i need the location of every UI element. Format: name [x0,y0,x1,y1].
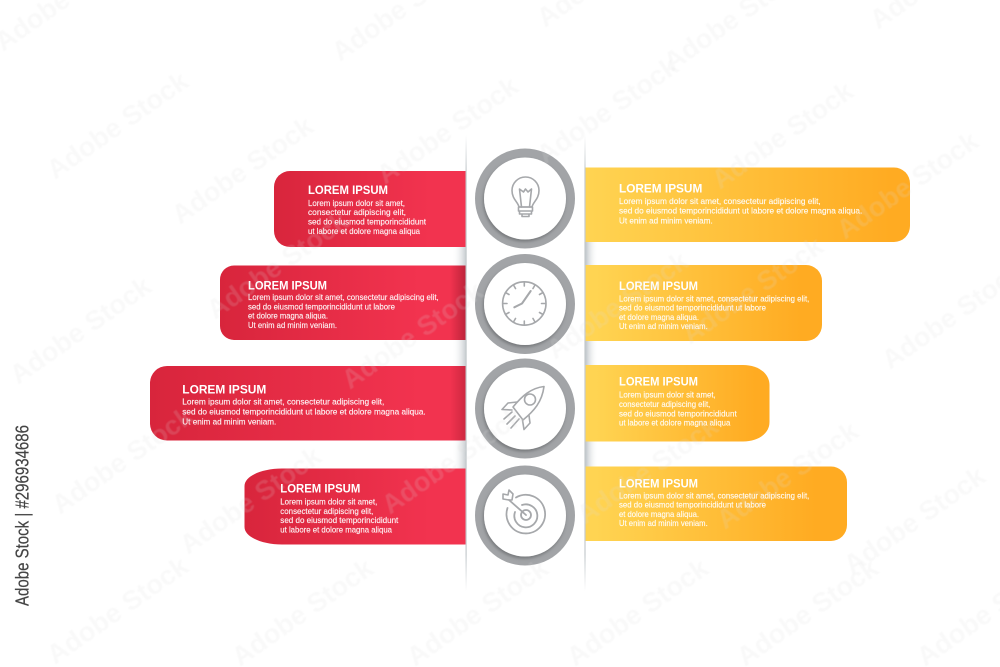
watermark: Adobe Stock [831,125,984,245]
watermark: Adobe Stock [46,400,199,520]
watermark: Adobe Stock [376,400,529,520]
text block: yellow bar 2: Lorem ipsum dolor sit amet, consectetur adipiscing elit, [619,293,809,303]
icon: clock [503,282,546,325]
watermark: Adobe Stock [676,230,829,350]
text block: yellow bar 1: Ut enim ad minim veniam. [619,215,713,225]
panel: circle with clock [475,254,575,354]
text block: yellow bar 2 [619,293,809,331]
watermark: Adobe Stock [336,275,489,395]
text block: red bar 3 [182,397,426,427]
text block: yellow bar 4: Ut enim ad minim veniam. [619,518,708,528]
text block: yellow bar 3: sed do eiusmod temporincididunt [619,408,737,418]
watermark: Adobe Stock [711,415,864,535]
text block: red bar 4: ut labore et dolore magna aliqua [280,524,392,534]
panel: yellow bar 4 [585,466,847,541]
heading: yellow bar 2: LOREM IPSUM [619,279,698,293]
watermark: Adobe Stock [201,205,354,325]
icon: lightbulb [512,177,539,216]
text block: red bar 2: sed do eiusmod temporincididunt ut labore [248,301,395,311]
text block: yellow bar 4: et dolore magna aliqua. [619,509,699,519]
watermark: Adobe Stock [531,50,684,170]
watermark: Adobe Stock [41,550,194,667]
text block: yellow bar 3 [619,390,737,427]
text block: red bar 2: Ut enim ad minim veniam. [248,320,337,330]
watermark: Adobe Stock [41,65,194,185]
heading: yellow bar 1: LOREM IPSUM [619,181,702,195]
panel: red bar 1 [274,171,466,247]
watermark: Adobe Stock [4,270,157,390]
text block: red bar 2: et dolore magna aliqua. [248,311,328,321]
watermark: Adobe Stock [706,75,859,195]
watermark: Adobe Stock [571,410,724,530]
text block: red bar 4: sed do eiusmod temporincididunt [280,515,399,525]
text block: red bar 4: Lorem ipsum dolor sit amet, [280,497,377,507]
text block: yellow bar 2: et dolore magna aliqua. [619,312,699,322]
text block: yellow bar 2: Ut enim ad minim veniam. [619,321,708,331]
text block: yellow bar 4 [619,490,809,528]
panel: circle with lightbulb [475,148,575,248]
heading: red bar 3: LOREM IPSUM [182,382,266,396]
watermark: Adobe Stock [838,460,991,580]
text block: yellow bar 2: sed do eiusmod temporincididunt ut labore [619,303,766,313]
text block: yellow bar 1: Lorem ipsum dolor sit amet, consectetur adipiscing elit, [619,196,821,206]
panel: yellow bar 3 [585,365,770,442]
watermark: Adobe Stock [541,245,694,365]
text block: red bar 3: Ut enim ad minim veniam. [182,417,276,427]
heading: red bar 1: LOREM IPSUM [308,183,388,197]
panel: yellow bar 1 [585,168,910,242]
text block: red bar 1: ut labore et dolore magna aliqua [308,226,420,236]
text block: yellow bar 1 [619,196,862,225]
text block: yellow bar 4: sed do eiusmod temporincididunt ut labore [619,500,766,510]
heading: red bar 4: LOREM IPSUM [280,482,360,496]
text block: yellow bar 3: Lorem ipsum dolor sit amet, [619,390,716,400]
panel: red bar 3 [150,366,466,440]
icon: rocket [502,386,544,430]
text block: red bar 3: sed do eiusmod temporincididunt ut labore et dolore magna aliqua. [182,407,426,417]
heading: red bar 2: LOREM IPSUM [248,278,327,292]
text block: red bar 1: consectetur adipiscing elit, [308,207,406,217]
heading: yellow bar 4: LOREM IPSUM [619,477,698,491]
text block: yellow bar 4: Lorem ipsum dolor sit amet, consectetur adipiscing elit, [619,490,809,500]
panel: circle with target [475,466,575,566]
text block: red bar 1: Lorem ipsum dolor sit amet, [308,198,405,208]
text block: red bar 1: sed do eiusmod temporincididunt [308,216,427,226]
heading: yellow bar 3: LOREM IPSUM [619,375,698,389]
text block: yellow bar 1: sed do eiusmod temporincididunt ut labore et dolore magna aliqua. [619,206,862,216]
text block: yellow bar 3: ut labore et dolore magna aliqua [619,417,731,427]
watermark: Adobe Stock [166,110,319,230]
text block: yellow bar 3: consectetur adipiscing elit, [619,399,710,409]
panel: circle with rocket [475,358,575,458]
watermark: Adobe Stock [371,70,524,190]
panel: yellow bar 2 [585,265,822,341]
text block: red bar 4 [280,497,399,534]
side credit text: Adobe Stock | #296934686 [12,425,32,606]
text block: red bar 4: consectetur adipiscing elit, [280,506,373,516]
text block: red bar 2: Lorem ipsum dolor sit amet, consectetur adipiscing elit, [248,292,439,302]
panel: red bar 4 [244,468,466,544]
text block: red bar 2 [248,292,439,330]
panel: red bar 2 [220,266,466,340]
panel: centre strip with side shadows [452,135,598,591]
icon: target [503,490,545,533]
text block: red bar 1 [308,198,427,236]
text block: red bar 3: Lorem ipsum dolor sit amet, consectetur adipiscing elit, [182,397,384,407]
watermark: Adobe Stock [174,440,327,560]
